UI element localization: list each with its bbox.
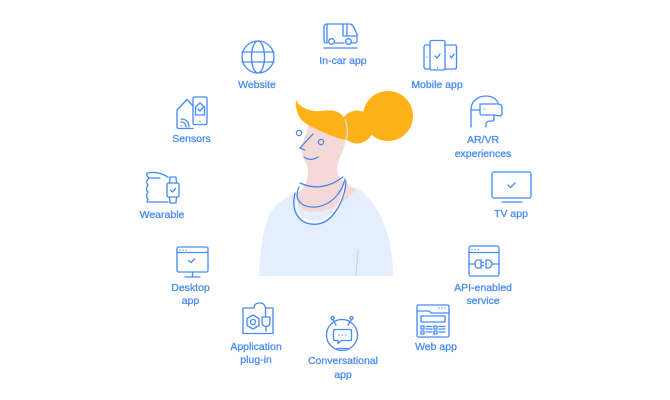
conversational app: Conversational: [308, 355, 378, 367]
desktop app: app: [182, 295, 199, 307]
API-enabled service: service: [466, 295, 500, 307]
hair tie: [345, 119, 347, 140]
mobile app: [411, 40, 463, 91]
icon: TV: [492, 172, 531, 202]
AR/VR experiences: [455, 96, 511, 160]
TV app: [492, 172, 531, 220]
hair: [296, 100, 348, 140]
in-car app: [319, 24, 367, 67]
web app: Web app: [415, 341, 457, 353]
conversational app: app: [334, 369, 352, 381]
icon: window with plug: [469, 246, 499, 276]
face features: [296, 130, 324, 159]
AR/VR experiences: AR/VR: [467, 134, 499, 146]
necklaces: [294, 177, 346, 224]
shirt: [259, 188, 393, 276]
icon: van: [324, 24, 357, 48]
mobile app: Mobile app: [411, 79, 463, 91]
sensors: Sensors: [172, 133, 211, 145]
icon: VR headset: [471, 96, 502, 127]
icon: browser layout: [417, 305, 449, 337]
icon: globe: [242, 41, 274, 73]
ponytail: [340, 91, 413, 144]
web app: [415, 305, 457, 353]
icon: wrist with watch: [146, 172, 179, 203]
icon: monitor window: [177, 247, 208, 277]
desktop app: [171, 247, 210, 307]
wearable: [140, 172, 185, 221]
sensors: [172, 97, 211, 145]
icon: bag with plug and gear: [243, 303, 273, 334]
icon: robot chat: [326, 316, 358, 350]
person illustration: [259, 91, 413, 276]
API-enabled service: API-enabled: [454, 282, 512, 294]
icon: phones: [424, 40, 456, 70]
website: [238, 41, 276, 91]
AR/VR experiences: experiences: [455, 148, 511, 160]
application plug-in: [230, 303, 282, 366]
application plug-in: Application: [230, 341, 282, 353]
desktop app: Desktop: [171, 282, 210, 294]
conversational app: [308, 316, 378, 381]
wearable: Wearable: [140, 209, 185, 221]
shirt crease: [356, 249, 358, 276]
application plug-in: plug-in: [240, 354, 272, 366]
in-car app: In-car app: [319, 55, 367, 67]
website: Website: [238, 79, 276, 91]
TV app: TV app: [494, 208, 528, 220]
neck and face: [295, 124, 357, 212]
API-enabled service: [454, 246, 512, 307]
icon: house and phone: [177, 97, 207, 128]
